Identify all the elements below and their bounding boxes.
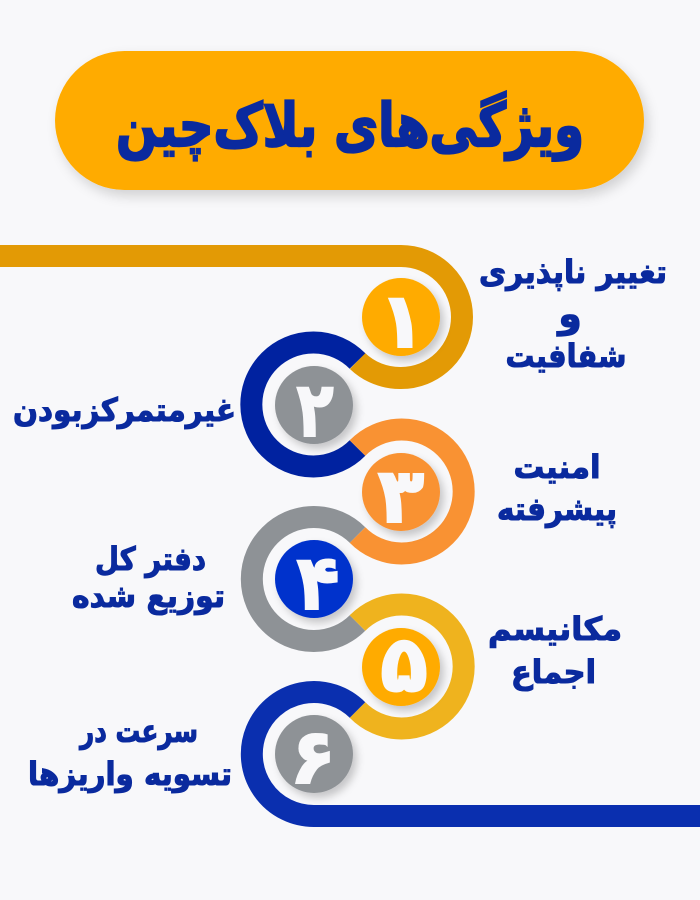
number 6: ۶ xyxy=(290,712,336,801)
label 1: تغییر ناپذیری xyxy=(479,253,667,291)
label 1: شفافیت xyxy=(506,337,626,375)
step 2 disc xyxy=(275,366,353,455)
label 3 xyxy=(497,448,617,528)
connector path: segment 1 xyxy=(0,256,462,378)
step 6 disc xyxy=(275,712,353,801)
step 4 disc xyxy=(275,539,353,628)
label 3: امنیت xyxy=(514,448,600,486)
label 6: سرعت در xyxy=(78,712,198,750)
label 4 xyxy=(72,540,225,615)
step 3 disc xyxy=(362,451,440,540)
step 1 disc xyxy=(362,276,440,365)
label 4: دفتر کل xyxy=(95,540,206,578)
connector path: segment 4 xyxy=(252,517,358,641)
label 5: مکانیسم xyxy=(488,610,622,648)
label 6 xyxy=(28,712,232,793)
label 5 xyxy=(488,610,622,691)
connector path: segment 2 xyxy=(251,342,358,466)
number 1: ۱ xyxy=(379,276,425,365)
label 5: اجماع xyxy=(511,653,596,691)
label 2: غیرمتمرکزبودن xyxy=(13,391,236,429)
number 3: ۳ xyxy=(378,451,424,540)
label 1 xyxy=(479,253,667,375)
label 3: پیشرفته xyxy=(497,490,617,528)
label 1: و xyxy=(556,292,582,337)
number 5: ۵ xyxy=(380,620,428,710)
label 6: تسویه واریزها xyxy=(28,755,232,793)
label 4: توزیع شده xyxy=(72,577,225,615)
connector path: segment 3 xyxy=(358,430,464,554)
title: ویژگی‌های بلاک‌چین xyxy=(116,91,584,161)
number 2: ۲ xyxy=(296,366,334,455)
number 4: ۴ xyxy=(297,539,339,628)
connector path: segment 5 xyxy=(358,604,464,728)
step 5 disc xyxy=(362,620,440,710)
title banner xyxy=(55,51,644,190)
connector path: segment 6 xyxy=(252,692,700,816)
